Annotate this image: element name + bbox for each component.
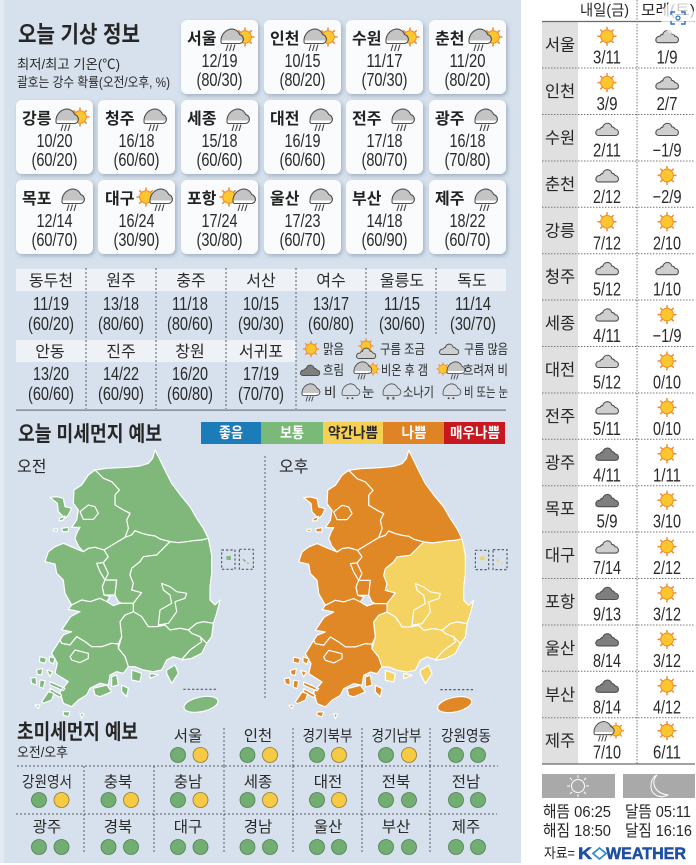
row: Sejong: −1/9 [652,325,682,346]
row: Gangneung: 강릉 [545,221,575,240]
region: Sejong: 세종 [244,773,272,791]
card: Chuncheon: 춘천 [435,30,464,48]
row: Mokpo: 목포 [545,501,575,519]
row: Gwangju: 4/11 [593,464,621,485]
card: Jeju [429,180,506,254]
row: Seoul: 서울 [545,36,575,55]
table cell: Andong [28,343,74,404]
card: Incheon: 10/15 [284,50,320,71]
row: Chuncheon [545,166,682,207]
label: morning: 오전 [17,458,46,476]
row: Jeju [545,721,681,763]
row: Busan: 4/12 [653,696,681,717]
card: Incheon: (80/20) [280,69,326,90]
source: KWeather: WEATHER [606,844,686,863]
row: Daejeon: 0/10 [653,372,681,392]
card: Busan: 14/18 [366,210,402,231]
card: Seoul: 12/19 [202,50,238,71]
legend: weather icons: 구름 조금 [380,342,425,357]
heading: fine dust forecast: 오늘 미세먼지 예보 [18,423,162,446]
card: Chuncheon: 11/20 [450,50,486,71]
card: Jeonju: (80/70) [362,149,408,170]
card: Incheon: 인천 [270,30,299,48]
legend: weather icons: 비 [324,385,336,400]
table cell: Wonju: (80/60) [98,313,144,334]
table cell: Wonju [98,272,144,334]
region: Chungbuk: 충북 [104,773,132,791]
title: today's weather: 오늘 기상 정보 [18,21,140,47]
panel: city forecast cards [16,20,506,254]
card: Cheongju [98,100,175,174]
card: Daejeon: 16/19 [284,130,320,151]
row: Daegu: 대구 [545,546,575,565]
legend: air quality scale: 나쁨 [402,425,426,442]
region: Seoul: 서울 [174,727,202,745]
card: Gwangju: 광주 [435,110,465,128]
row: Busan: 부산 [545,685,575,704]
table cell: Dokdo: 11/14 [455,293,491,314]
row: Daejeon: 대전 [545,360,575,380]
source: KWeather: 자료= [544,845,575,861]
row: Incheon: 인천 [545,82,575,101]
legend: air quality scale [201,422,505,444]
region: Daegu [170,818,208,854]
region: Yeongseo: 강원영서 [22,773,72,791]
region: Ulsan [310,818,346,854]
region: Jeju [448,818,486,854]
card: Daejeon: 대전 [270,110,299,128]
table cell: Dokdo: (30/70) [450,313,496,334]
row: Ulsan: 울산 [545,639,575,658]
row: Ulsan [545,630,681,671]
panel: sunrise and sunset [542,774,615,840]
table cell: Seogwipo: 서귀포 [239,343,283,361]
table cell: Wonju: 13/18 [103,293,139,314]
card: Gwangju: (70/80) [444,149,490,170]
row: Seoul [545,27,678,68]
panel: ultrafine dust grid [16,727,498,854]
region: Gyeongnam: 경남 [244,818,272,836]
row: Ulsan: 3/12 [653,650,681,671]
region: Chungnam: 충남 [174,773,202,791]
table cell: Yeosu: (60/80) [308,313,354,334]
card: Gangneung: 강릉 [22,110,52,128]
table cell: Dongducheon: 11/19 [33,293,69,314]
legend: weather icons: 눈 [362,385,374,400]
card: Busan: 부산 [352,190,382,208]
source: KWeather: K [578,844,593,863]
card: Sejong: 세종 [187,110,217,128]
column header: day after tomorrow: 모레(토) [641,2,695,19]
region: South Gyeonggi [372,727,422,762]
region: Gyeongbuk: 경북 [104,818,132,836]
row: Cheongju: 5/12 [593,279,621,300]
legend: weather icons: 구름 많음 [464,342,508,357]
text: sunrise: 해뜸 06:25 [543,803,611,821]
icon: crescent moon [651,775,668,797]
row: Seoul: 3/11 [593,47,621,68]
icon: sun outline [567,775,589,797]
table cell: Dongducheon: (60/20) [28,313,74,334]
card: Jeonju: 17/18 [366,130,402,151]
text: morning / afternoon note: 오전/오후 [17,745,68,760]
table cell: Changwon: (60/80) [167,383,213,404]
table cell: Dongducheon: 동두천 [29,272,73,290]
card: Suwon [346,20,423,94]
table cell: Seosan [238,272,284,334]
row: Gangneung [545,212,681,253]
card: Gwangju: 16/18 [450,130,486,151]
row: Chuncheon: −2/9 [652,186,682,207]
text block: description: 최저/최고 기온(℃) [17,57,120,72]
table cell: Ulleungdo [379,272,425,334]
map: afternoon fine dust [284,450,507,719]
table cell: Chungju [167,272,213,334]
card: Jeonju: 전주 [352,110,382,128]
row: Suwon: 2/11 [593,140,621,160]
row: Mokpo: 3/10 [653,511,681,532]
card: Busan: (60/90) [362,229,408,250]
table cell: Jinju [98,343,144,404]
table cell: Chungju: 11/18 [172,293,208,314]
card: Jeju: 18/22 [450,210,486,231]
table cell: Jinju: 14/22 [103,363,139,384]
table cell: Chungju: 충주 [176,272,206,290]
row: Busan: 8/14 [593,696,621,717]
row: Pohang: 포항 [545,592,575,612]
region: Yeongdong [441,727,491,762]
row: Suwon: −1/9 [652,140,682,160]
row: Seoul: 1/9 [656,47,678,68]
row: Jeonju: 전주 [545,407,575,426]
card: Ulsan: (60/70) [280,229,326,250]
region: Jeonnam [448,773,486,808]
text block: description [17,57,170,90]
row: Gwangju: 광주 [545,453,575,472]
card: Daegu: 16/24 [118,210,154,231]
source: KWeather [544,844,686,863]
card: Gangneung: 10/20 [36,130,72,151]
table cell: Changwon: 16/20 [172,363,208,384]
row: Jeju: 7/10 [593,742,621,763]
legend: weather icons: 맑음 [323,342,344,357]
card: Jeju: 제주 [435,190,465,208]
row: Cheongju: 청주 [545,268,575,287]
card: Cheongju: 16/18 [118,130,154,151]
card: Ulsan: 17/23 [284,210,320,231]
legend: weather icons: 흐림 [323,363,344,378]
table cell: Chungju: (80/60) [167,313,213,334]
row: Chuncheon: 2/12 [593,186,621,207]
legend: weather icons: 흐려져 비 [463,363,508,378]
row: Jeonju: 0/10 [653,418,681,439]
card: Busan [346,180,423,254]
row: Ulsan: 8/14 [593,650,621,671]
card: Seoul: 서울 [187,30,217,48]
card: Seoul [181,20,258,94]
region: Chungbuk [101,773,138,808]
region: Gyeongbuk [101,818,138,854]
region: Incheon [240,727,278,762]
text: moonrise: 달뜸 05:11 [625,803,691,821]
row: Incheon: 3/9 [596,93,618,114]
region: Jeonbuk [378,773,416,808]
card: Incheon [264,20,341,94]
row: Suwon: 수원 [545,128,575,148]
row: Pohang: 9/13 [593,604,621,624]
region: South Gyeonggi: 경기남부 [372,727,422,745]
legend: air quality scale: 좋음 [219,425,243,442]
card: Daegu [98,180,175,254]
table cell: Wonju: 원주 [106,272,136,290]
table cell: Jinju: (60/90) [98,383,144,404]
legend: weather icons: 소나기 [403,385,434,400]
row: Daegu: 2/12 [653,557,681,578]
panel: other cities table [16,268,506,409]
table cell: Changwon: 창원 [175,343,205,361]
region: Incheon: 인천 [244,727,272,745]
card: Gangneung: (60/20) [32,149,78,170]
row: Daegu: 7/14 [593,557,621,578]
row: Busan [545,676,681,717]
table cell: Yeosu: 여수 [316,272,346,290]
row: Mokpo [545,491,681,532]
table cell: Yeosu: 13/17 [313,293,349,314]
row: Chuncheon: 춘천 [545,175,575,194]
card: Cheongju: 청주 [105,110,135,128]
card: Mokpo: 목포 [22,191,52,208]
map: morning fine dust [31,450,253,718]
row: Daejeon [545,352,681,392]
region: North Gyeonggi [302,727,352,762]
region: Busan: 부산 [382,818,410,836]
row: Pohang [545,584,681,624]
row: Jeju: 6/11 [653,742,681,763]
table cell: Ulleungdo: (30/60) [379,313,425,334]
card: Jeju: (60/70) [444,229,490,250]
heading: ultrafine dust forecast: 초미세먼지 예보 [17,721,138,744]
region: Sejong [240,773,278,808]
column header: tomorrow: 내일(금) [580,2,629,19]
row: Jeonju: 5/11 [593,418,621,439]
table cell: Andong: 13/20 [33,363,69,384]
row: Sejong: 세종 [545,314,575,333]
region: Ulsan: 울산 [314,818,342,836]
region: Busan [378,818,416,854]
row: Gwangju: 1/11 [653,464,681,485]
card: Daejeon: (60/60) [280,149,326,170]
label: afternoon: 오후 [279,458,308,476]
row: Pohang: 3/12 [653,604,681,624]
legend: air quality scale: 보통 [280,425,304,442]
row: Mokpo: 5/9 [596,511,618,532]
text block: description: 괄호는 강수 확률(오전/오후, %) [17,75,170,90]
region: Gwangju: 광주 [33,818,61,836]
card: Sejong: 15/18 [202,130,238,151]
card: Seoul: (80/30) [196,69,242,90]
region: Gyeongnam [240,818,278,854]
row: Jeonju [545,398,681,439]
region: Jeonbuk: 전북 [382,773,410,791]
row: Daegu [545,537,681,578]
card: Gangneung [16,100,93,174]
row: Cheongju: 1/10 [653,279,681,300]
region: Daegu: 대구 [174,818,202,836]
region: Yeongdong: 강원영동 [441,727,491,745]
row: Jeju: 제주 [545,732,575,751]
row: Suwon [545,123,682,160]
panel: tomorrow and day-after forecast table [542,0,695,764]
card: Sejong: (60/60) [196,149,242,170]
table cell: Seogwipo: (70/70) [238,383,284,404]
card: Mokpo: (60/70) [32,229,78,250]
table cell: Jinju: 진주 [106,343,136,361]
table cell: Seosan: (90/30) [238,313,284,334]
table cell: Seosan: 10/15 [243,293,279,314]
row: Gangneung: 2/10 [653,232,681,253]
region: Jeju: 제주 [452,818,480,836]
region: Jeonnam: 전남 [452,773,480,791]
card: Daejeon [264,100,341,174]
text: sunset: 해짐 18:50 [543,822,611,840]
region: Chungnam [170,773,208,808]
table cell: Ulleungdo: 울릉도 [380,272,424,290]
legend: weather icons: 비온 후 갬 [381,363,428,378]
card: Pohang: (30/80) [196,229,242,250]
legend: air quality scale: 매우나쁨 [450,425,500,442]
row: Daejeon: 5/12 [593,372,621,392]
card: Ulsan [264,180,341,254]
panel: moonrise and moonset [623,774,695,840]
card: Suwon: (70/30) [362,69,408,90]
row: Incheon: 2/7 [656,93,678,114]
table cell: Seogwipo: 17/19 [243,363,279,384]
icon: scan overlay [661,1,695,35]
card: Mokpo [16,180,93,254]
legend: weather icons [301,338,508,401]
region: Seoul [170,727,208,762]
card: Chuncheon [429,20,506,94]
card: Mokpo: 12/14 [36,210,72,231]
card: Ulsan: 울산 [270,190,300,208]
table cell: Andong: (60/60) [28,383,74,404]
card: Chuncheon: (80/20) [444,69,490,90]
card: Pohang: 포항 [187,190,217,208]
row: Gangneung: 7/12 [593,232,621,253]
table cell: Dongducheon [28,272,74,334]
card: Jeonju [346,100,423,174]
row: Cheongju [545,262,681,300]
row: Sejong [545,305,682,346]
table cell: Ulleungdo: 11/15 [384,293,420,314]
region: Daejeon [310,773,346,808]
region: Yeongseo [22,773,72,808]
region: Daejeon: 대전 [314,773,342,791]
table cell: Changwon [167,343,213,404]
card: Daegu: (30/90) [114,229,160,250]
table cell: Yeosu [308,272,354,334]
table cell: Seogwipo [238,343,284,404]
region: North Gyeonggi: 경기북부 [302,727,352,745]
region: Gwangju [32,818,69,854]
table cell: Seosan: 서산 [246,272,276,290]
card: Cheongju: (60/60) [114,149,160,170]
table cell: Dokdo: 독도 [457,273,487,290]
card: Gwangju [429,100,506,174]
row: Gwangju [545,444,681,485]
card: Suwon: 수원 [352,30,381,48]
row: Sejong: 4/11 [593,325,621,346]
card: Suwon: 11/17 [366,50,402,71]
card: Daegu: 대구 [105,190,135,208]
legend: air quality scale: 약간나쁨 [328,425,378,442]
table cell: Andong: 안동 [35,343,65,361]
card: Pohang: 17/24 [202,210,238,231]
legend: weather icons: 비 또는 눈 [464,385,508,400]
card: Sejong [181,100,258,174]
table cell: Dokdo [450,273,496,334]
row: Incheon [545,73,678,114]
card: Pohang [181,180,258,254]
